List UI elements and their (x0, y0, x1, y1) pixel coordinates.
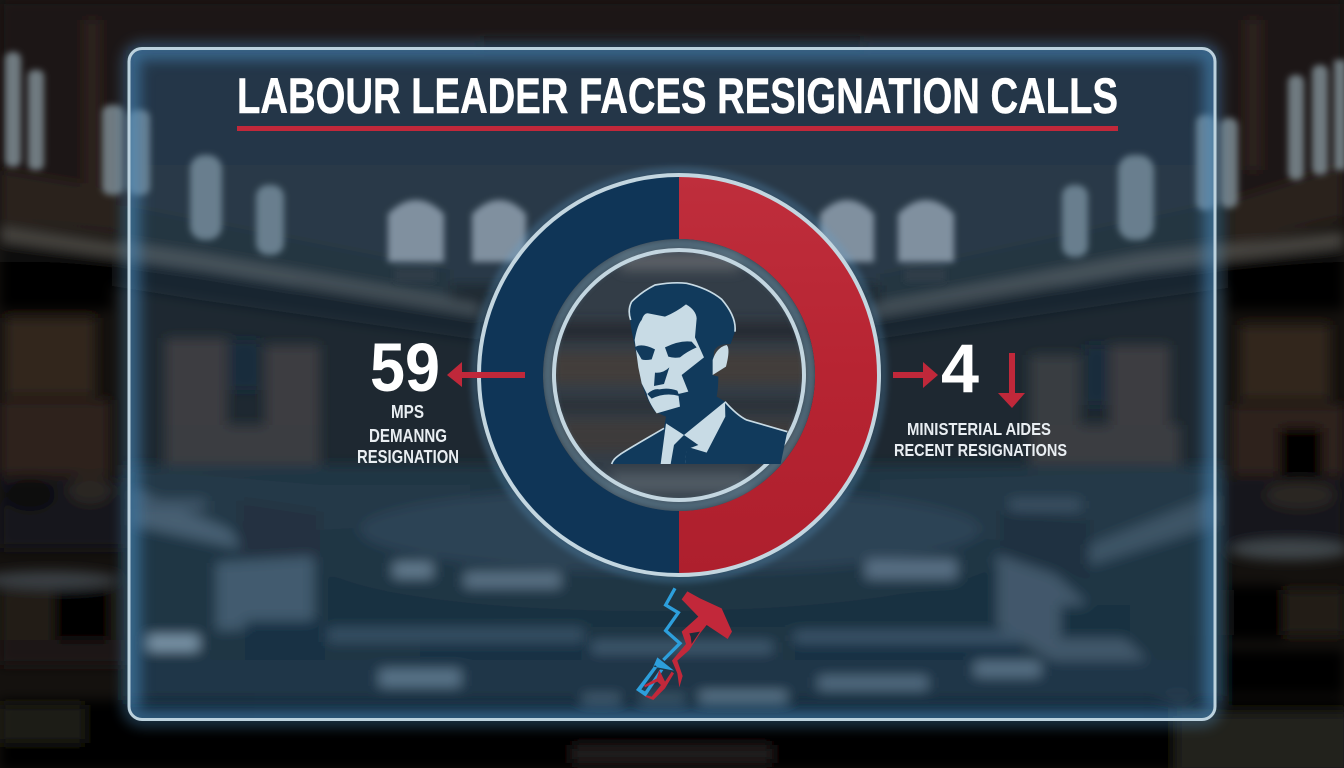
side balcony fronts (0, 170, 120, 235)
arrow: right pointing (893, 362, 938, 388)
lightning bolt in blue (663, 588, 680, 660)
blue wedge and outline (636, 657, 674, 697)
desk highlights (394, 563, 432, 577)
arched windows (5, 52, 1344, 282)
stat label (357, 402, 459, 467)
donut segment: red (679, 175, 879, 575)
frosted glass panel (129, 48, 1215, 720)
people and desks outside panel (0, 478, 125, 548)
portrait outline (612, 283, 787, 464)
stat: 59 MPs demanding resignation (357, 329, 525, 467)
centre floor (125, 465, 1225, 715)
centre disc (540, 239, 820, 511)
stat label (894, 419, 1067, 460)
donut outer rim (479, 175, 879, 575)
red fractures (644, 670, 674, 700)
centre disc ring (554, 250, 804, 500)
donut segment: navy (479, 175, 679, 575)
grey floor panels (217, 557, 313, 630)
donut chart (475, 171, 883, 579)
portrait ear (713, 345, 728, 375)
portrait tie (671, 435, 698, 464)
stat label: RESIGNATION (357, 447, 459, 467)
icon: broken gavel and lightning (636, 588, 732, 700)
portrait collar (661, 402, 725, 464)
red gavel head and handle (672, 591, 732, 687)
wood panelling (5, 318, 95, 396)
central benches (360, 488, 980, 572)
portrait face (635, 304, 704, 413)
icon: portrait of leader (612, 283, 787, 464)
stat number 59: 59 (370, 329, 440, 406)
stat: 4 ministerial aides recent resignations (893, 330, 1067, 460)
arrow: down pointing (998, 353, 1025, 408)
stat label: MPS (391, 402, 424, 422)
stat label: RECENT RESIGNATIONS (894, 440, 1067, 460)
title underline (237, 126, 1118, 131)
portrait silhouette (612, 283, 787, 464)
stat number 4: 4 (941, 330, 979, 407)
arrow: left pointing (447, 362, 525, 387)
bottom (0, 700, 1344, 768)
portrait brows and eyes (635, 341, 697, 399)
stat label: MINISTERIAL AIDES (907, 419, 1051, 439)
stat label: DEMANNG (369, 426, 447, 446)
